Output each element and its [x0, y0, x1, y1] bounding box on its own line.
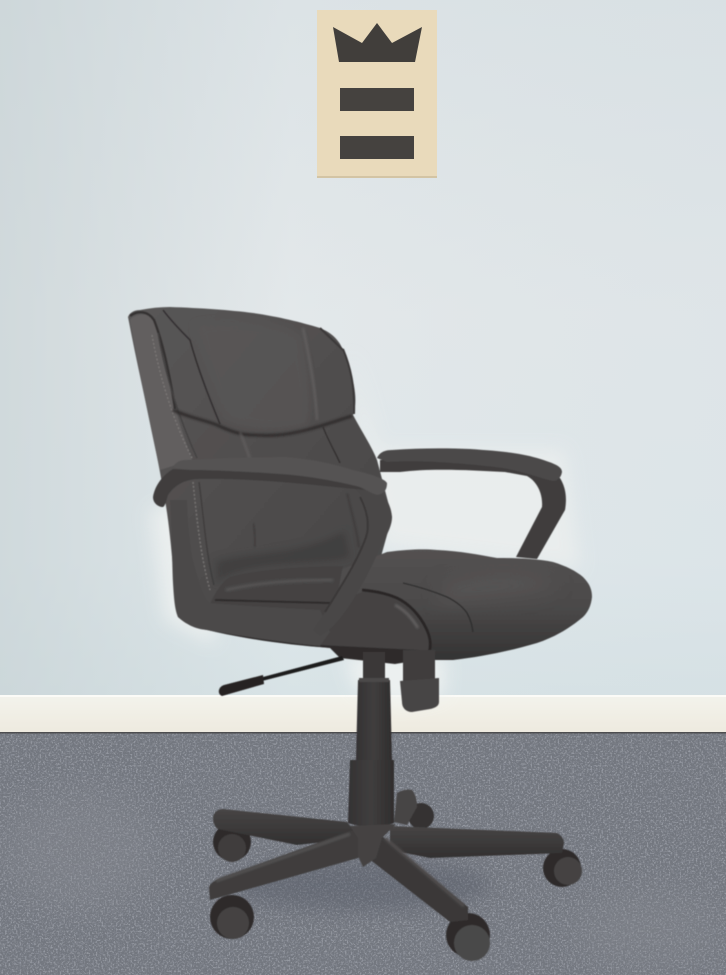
lower seams	[323, 427, 340, 463]
tilt lever	[219, 656, 344, 696]
headrest cushion seam	[173, 410, 352, 435]
height adjust knob	[400, 650, 439, 712]
near arm frame	[153, 457, 392, 646]
armrest pad	[173, 457, 387, 495]
casters behind base	[210, 803, 582, 961]
hub	[350, 824, 396, 867]
headrest highlight	[195, 322, 310, 429]
framed sign with crown and bars	[317, 10, 437, 178]
caster: rear left	[213, 823, 251, 862]
caster: front left	[210, 895, 254, 939]
back piping	[130, 312, 175, 409]
rear leg	[394, 790, 417, 825]
seat highlight	[440, 574, 560, 605]
far seat	[330, 549, 592, 660]
right leg	[390, 826, 564, 858]
rivets	[214, 614, 224, 626]
near seat cushion	[210, 566, 343, 610]
far armrest	[377, 448, 566, 559]
wall	[0, 0, 726, 696]
side upright	[170, 500, 330, 646]
lower back shadow	[215, 530, 350, 585]
caster: rear right	[408, 803, 434, 829]
seat base pan	[174, 508, 432, 664]
stitch lines	[152, 335, 192, 458]
seat cushion	[210, 549, 592, 660]
under-pad rail	[153, 469, 365, 507]
rear left leg	[213, 809, 360, 845]
glow halo around chair	[150, 350, 580, 705]
caster: front	[446, 913, 490, 961]
seat seam	[403, 583, 473, 632]
gas lift post	[348, 678, 394, 827]
carpet floor	[0, 732, 726, 975]
chair	[128, 307, 592, 961]
icon: upper bar	[340, 88, 414, 111]
front left leg	[209, 830, 370, 900]
side panel highlight	[130, 315, 192, 470]
icon: lower bar	[340, 136, 414, 159]
baseboard	[0, 695, 726, 733]
backrest	[128, 307, 392, 617]
neck under seat	[363, 652, 385, 682]
five-star base	[209, 790, 564, 922]
front upright	[313, 480, 392, 636]
front leg	[362, 832, 468, 922]
caster: right	[543, 849, 582, 887]
icon: crown	[333, 23, 422, 62]
